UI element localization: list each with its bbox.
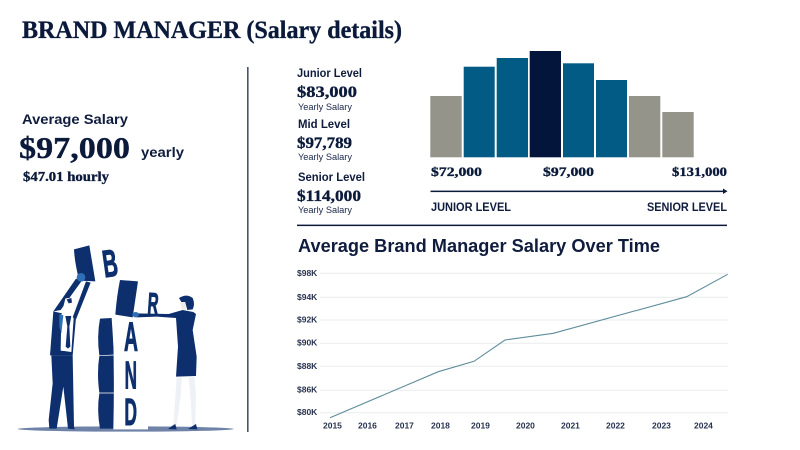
vertical divider bbox=[247, 67, 249, 432]
block R: R bbox=[146, 288, 160, 322]
axis labels: junior and senior level: SENIOR LEVEL bbox=[647, 202, 727, 214]
arrow: junior to senior bbox=[430, 188, 728, 194]
x axis labels: 2016 bbox=[358, 420, 377, 430]
line chart heading: Average Brand Manager Salary Over Time bbox=[298, 236, 660, 256]
salary trend line bbox=[330, 274, 728, 418]
senior level: Senior Level bbox=[298, 172, 365, 184]
hand bbox=[77, 273, 85, 282]
mid level: Yearly Salary bbox=[298, 152, 353, 162]
panel: average salary bbox=[19, 112, 184, 185]
x axis labels: 2020 bbox=[516, 420, 535, 430]
bar chart: salary distribution bbox=[430, 51, 694, 157]
block R bbox=[115, 280, 160, 322]
axis labels: junior and senior level bbox=[431, 202, 727, 214]
falling block B bbox=[74, 242, 120, 286]
yearly label: yearly bbox=[141, 144, 184, 160]
mid level: Mid Level bbox=[298, 119, 350, 131]
x axis labels bbox=[323, 420, 713, 430]
y axis labels: $90K bbox=[297, 338, 318, 348]
senior level bbox=[297, 172, 365, 215]
hourly rate: $47.01 hourly bbox=[23, 170, 109, 185]
salary range labels: $72,000 bbox=[431, 164, 482, 179]
y axis labels: $94K bbox=[297, 292, 318, 302]
x axis labels: 2023 bbox=[652, 420, 671, 430]
x axis labels: 2021 bbox=[561, 420, 580, 430]
woman holding block bbox=[132, 296, 197, 429]
block letters A N D: N bbox=[125, 355, 137, 398]
line chart: salary over time bbox=[297, 268, 728, 430]
x axis labels: 2022 bbox=[606, 420, 625, 430]
salary range labels bbox=[431, 164, 727, 179]
x axis labels: 2017 bbox=[395, 420, 414, 430]
junior level: Junior Level bbox=[297, 68, 362, 80]
junior level: $83,000 bbox=[297, 84, 357, 101]
y axis labels: $92K bbox=[297, 314, 318, 324]
head bbox=[63, 298, 74, 313]
ground shadow bbox=[18, 426, 234, 432]
senior level: Yearly Salary bbox=[298, 205, 353, 215]
junior level: Yearly Salary bbox=[298, 102, 353, 112]
block letters A N D bbox=[124, 314, 138, 434]
mid level: $97,789 bbox=[297, 135, 352, 152]
x axis labels: 2018 bbox=[431, 420, 450, 430]
block stack sides bbox=[98, 318, 114, 429]
y axis labels bbox=[297, 268, 318, 417]
junior level bbox=[297, 68, 362, 112]
x axis labels: 2015 bbox=[323, 420, 342, 430]
man reaching up bbox=[49, 273, 91, 429]
salary range labels: $131,000 bbox=[672, 164, 727, 179]
raised arms bbox=[53, 279, 81, 311]
panel: salary levels bbox=[297, 68, 365, 215]
axis labels: junior and senior level: JUNIOR LEVEL bbox=[431, 202, 511, 214]
senior level: $114,000 bbox=[297, 188, 361, 205]
illustration: people building BRAND blocks bbox=[18, 242, 234, 434]
white block faces bbox=[113, 318, 148, 429]
average salary heading: Average Salary bbox=[22, 112, 129, 127]
tie bbox=[65, 316, 71, 349]
x axis labels: 2019 bbox=[471, 420, 490, 430]
section divider bbox=[297, 225, 727, 226]
salary range labels: $97,000 bbox=[543, 164, 594, 179]
y axis labels: $98K bbox=[297, 268, 318, 278]
mid level bbox=[297, 119, 353, 162]
y axis labels: $80K bbox=[297, 407, 318, 417]
jacket bbox=[50, 311, 76, 355]
block letters A N D: D bbox=[124, 392, 137, 434]
falling block B: B bbox=[100, 242, 120, 286]
block letters A N D: A bbox=[124, 314, 138, 360]
shirt bbox=[61, 314, 73, 351]
y axis labels: $86K bbox=[297, 384, 318, 394]
title: BRAND MANAGER (Salary details) bbox=[22, 17, 402, 44]
x axis labels: 2024 bbox=[694, 420, 713, 430]
average salary value: $97,000 bbox=[19, 130, 130, 165]
y axis labels: $88K bbox=[297, 361, 318, 371]
legs bbox=[49, 355, 75, 429]
